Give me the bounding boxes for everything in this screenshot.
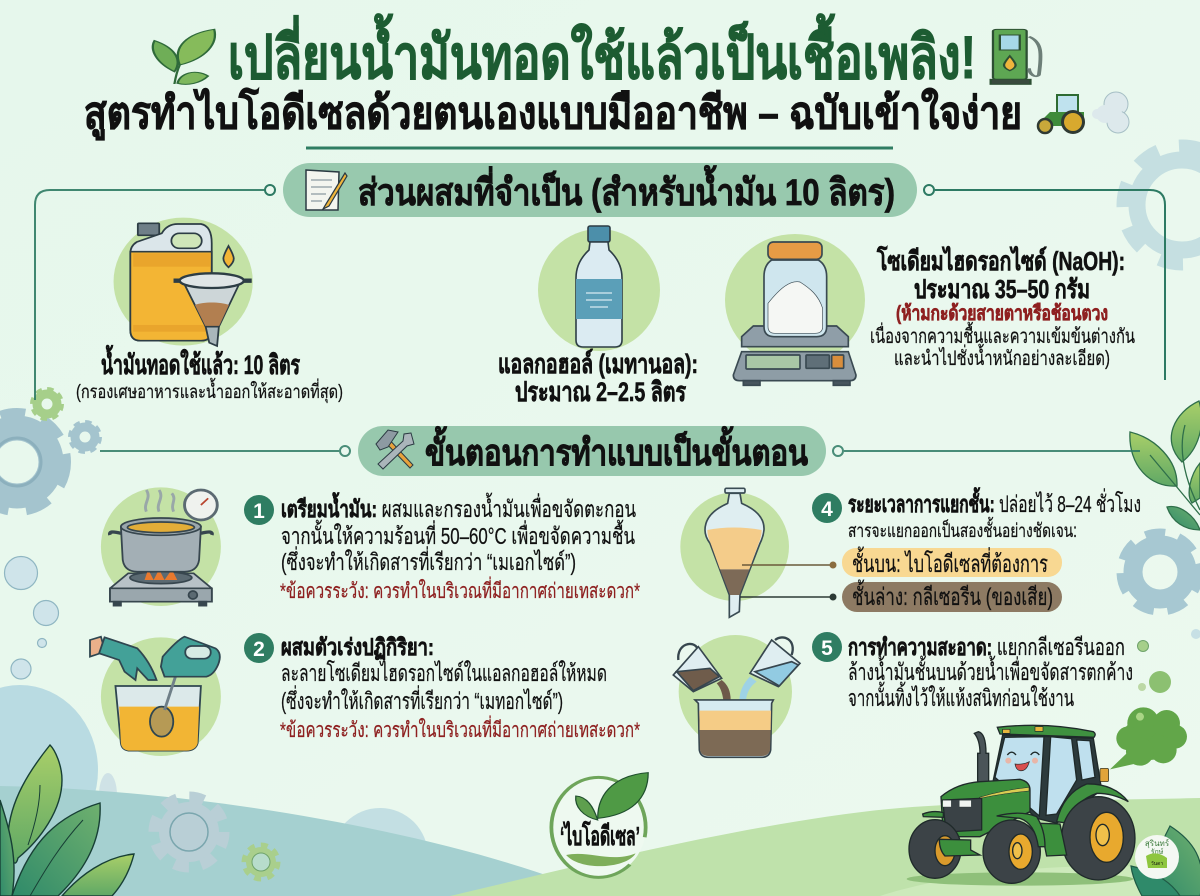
step text line 2: สารจะแยกออกเป็นสองชั้นอย่างชัดเจน: <box>848 517 1077 542</box>
leaves: top right <box>1130 401 1200 530</box>
step text line 1: ผสมตัวเร่งปฏิกิริยา: <box>281 634 434 660</box>
ingredient note: (กรองเศษอาหารและน้ำออกให้สะอาดที่สุด) <box>76 378 343 404</box>
ingredient name: แอลกอฮอล์ (เมทานอล): <box>498 348 698 379</box>
icon: separating funnel <box>680 488 789 617</box>
callout: lower layer <box>740 579 1062 612</box>
step number: 5 <box>821 637 833 660</box>
logo text: ‘ไบโอดีเซล’ <box>560 820 640 851</box>
gear: bottom <box>154 797 224 867</box>
ingredient: used oil <box>76 218 343 404</box>
gear: top right <box>1124 147 1200 263</box>
step text line 2: ละลายโซเดียมไฮดรอกไซด์ในแอลกอฮอล์ให้หมด <box>281 660 607 686</box>
connector lines: ingredients <box>35 185 1165 400</box>
main title: เปลี่ยนน้ำมันทอดใช้แล้วเป็นเชื้อเพลิง! <box>228 13 976 91</box>
heading text: ส่วนผสมที่จำเป็น (สำหรับน้ำมัน 10 ลิตร) <box>358 165 895 213</box>
divider <box>306 146 893 150</box>
background hills <box>0 685 1200 896</box>
icon: exhaust smoke <box>1092 92 1129 133</box>
step text line 1: เตรียมน้ำมัน: ผสมและกรองน้ำมันเพื่อขจัดตะกอน <box>281 492 636 522</box>
callout: lower layer: ชั้นล่าง: กลีเซอรีน (ของเสีย) <box>852 579 1053 611</box>
heading text: ขั้นตอนการทำแบบเป็นขั้นตอน <box>425 426 808 473</box>
step text line 1: การทำความสะอาด: แยกกลีเซอรีนออก <box>848 634 1125 660</box>
icon: oil jug and strainer <box>114 218 253 346</box>
step number <box>812 632 842 662</box>
bubbles right <box>1138 629 1200 693</box>
connector lines: steps <box>100 446 1140 456</box>
step number: 2 <box>253 638 265 661</box>
ingredient name: น้ำมันทอดใช้แล้ว: 10 ลิตร <box>101 344 300 380</box>
ingredient amount: ประมาณ 35–50 กรัม <box>914 274 1090 304</box>
heading pill: steps <box>358 426 826 476</box>
gear: right middle <box>1123 535 1197 609</box>
step 2 <box>90 633 640 756</box>
callout: upper layer <box>742 546 1062 578</box>
logo: biodiesel <box>551 773 648 877</box>
leaves: bottom left <box>0 745 134 896</box>
ingredient: NaOH <box>725 234 1135 385</box>
ingredient amount: ประมาณ 2–2.5 ลิตร <box>515 377 686 407</box>
step text line 3: จากนั้นทิ้งไว้ให้แห้งสนิทก่อนใช้งาน <box>848 682 1074 711</box>
gear: small grey <box>71 423 99 451</box>
step warning: *ข้อควรระวัง: ควรทำในบริเวณที่มีอากาศถ่ายเทสะดวก* <box>280 576 640 603</box>
step 1 <box>101 487 640 606</box>
callout: upper layer: ชั้นบน: ไบโอดีเซลที่ต้องการ <box>852 546 1048 578</box>
step warning: *ข้อควรระวัง: ควรทำในบริเวณที่มีอากาศถ่ายเทสะดวก* <box>280 715 640 742</box>
watermark badge: สุรินทร์ <box>1145 838 1170 848</box>
icon: notepad and pencil <box>306 170 347 210</box>
icon: hammer and wrench <box>376 430 414 469</box>
icon: fuel pump <box>991 29 1041 84</box>
watermark badge: วันดา <box>1151 861 1163 867</box>
leaf: bottom right <box>1131 826 1200 896</box>
note line 3: และนำไปชั่งน้ำหนักอย่างละเอียด) <box>894 344 1110 370</box>
step number: 1 <box>253 500 265 523</box>
heading pill: ingredients <box>283 163 917 217</box>
watermark badge: รักษ์ <box>1151 848 1164 856</box>
gear: small green <box>33 390 61 418</box>
step 4 <box>680 487 1141 617</box>
icon: small tractor <box>1038 95 1084 133</box>
bubbles left <box>4 556 58 679</box>
step number <box>812 493 842 523</box>
gear: bottom green <box>244 845 278 879</box>
step text line 3: (ซึ่งจะทำให้เกิดสารที่เรียกว่า “เมเอกไซด์”) <box>281 546 576 575</box>
icon: jar on scale <box>725 234 865 385</box>
title <box>153 13 1041 91</box>
step number <box>244 633 274 663</box>
watermark badge <box>1135 835 1179 879</box>
subtitle: สูตรทำไบโอดีเซลด้วยตนเองแบบมืออาชีพ – ฉบับเข้าใจง่าย <box>84 86 1022 140</box>
step number: 4 <box>821 498 833 521</box>
icon: pouring jugs into beaker <box>673 635 800 757</box>
step text line 2: จากนั้นให้ความร้อนที่ 50–60°C เพื่อขจัดความชื้น <box>281 520 635 549</box>
step 5 <box>673 632 1133 757</box>
icon: pot on stove <box>101 487 221 606</box>
icon: hand mixer and beaker <box>90 637 221 756</box>
smoke cloud <box>1110 707 1187 769</box>
tractor <box>907 725 1135 886</box>
step text line 3: (ซึ่งจะทำให้เกิดสารที่เรียกว่า “เมทอกไซด์”) <box>281 685 563 714</box>
icon: bottle <box>538 226 660 351</box>
icon: leaf sprig <box>153 29 215 84</box>
warning note: (ห้ามกะด้วยสายตาหรือช้อนตวง <box>896 302 1108 325</box>
step number <box>244 495 274 525</box>
ingredient: methanol <box>498 226 698 407</box>
gear: left large <box>0 415 64 509</box>
